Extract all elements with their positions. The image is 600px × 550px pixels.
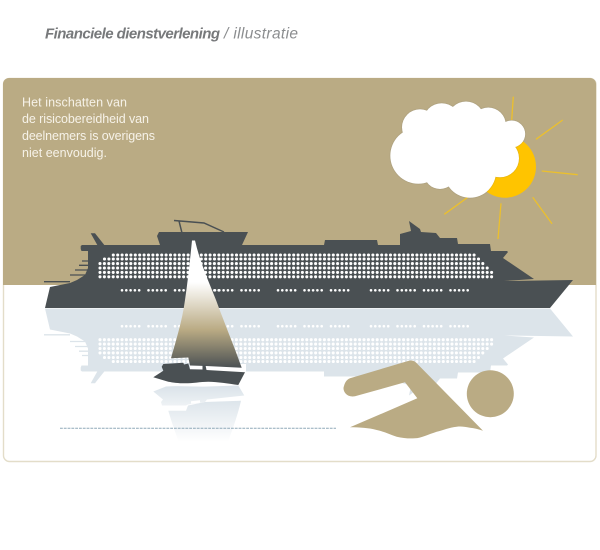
ship cabin windows [100,255,493,290]
panel: illustration background [3,78,596,462]
cruise ship [44,220,573,308]
title: / illustratie [223,26,298,42]
dashed waterline [60,427,336,429]
sail [171,240,242,368]
icon: cloud [390,102,525,198]
ship hull [45,221,573,308]
icon: swimmer [343,360,514,438]
text block: intro [22,96,155,160]
ship mast [174,220,224,233]
swimmer head [467,370,514,417]
swimmer body [343,360,483,438]
sailboat [153,240,246,385]
title: Financiele dienstverlening [45,26,220,42]
text block: intro: de risicobereidheid van [22,112,149,126]
ship reflection [44,308,573,396]
white gap behind cabin [190,364,246,373]
text block: intro: Het inschatten van [22,96,127,110]
title [45,26,298,42]
text block: intro: niet eenvoudig. [22,146,107,160]
ship stern decks [44,261,88,282]
text block: intro: deelnemers is overigens [22,129,155,143]
hull [153,363,245,385]
sailboat reflection [153,386,244,442]
icon: sun [444,97,578,239]
